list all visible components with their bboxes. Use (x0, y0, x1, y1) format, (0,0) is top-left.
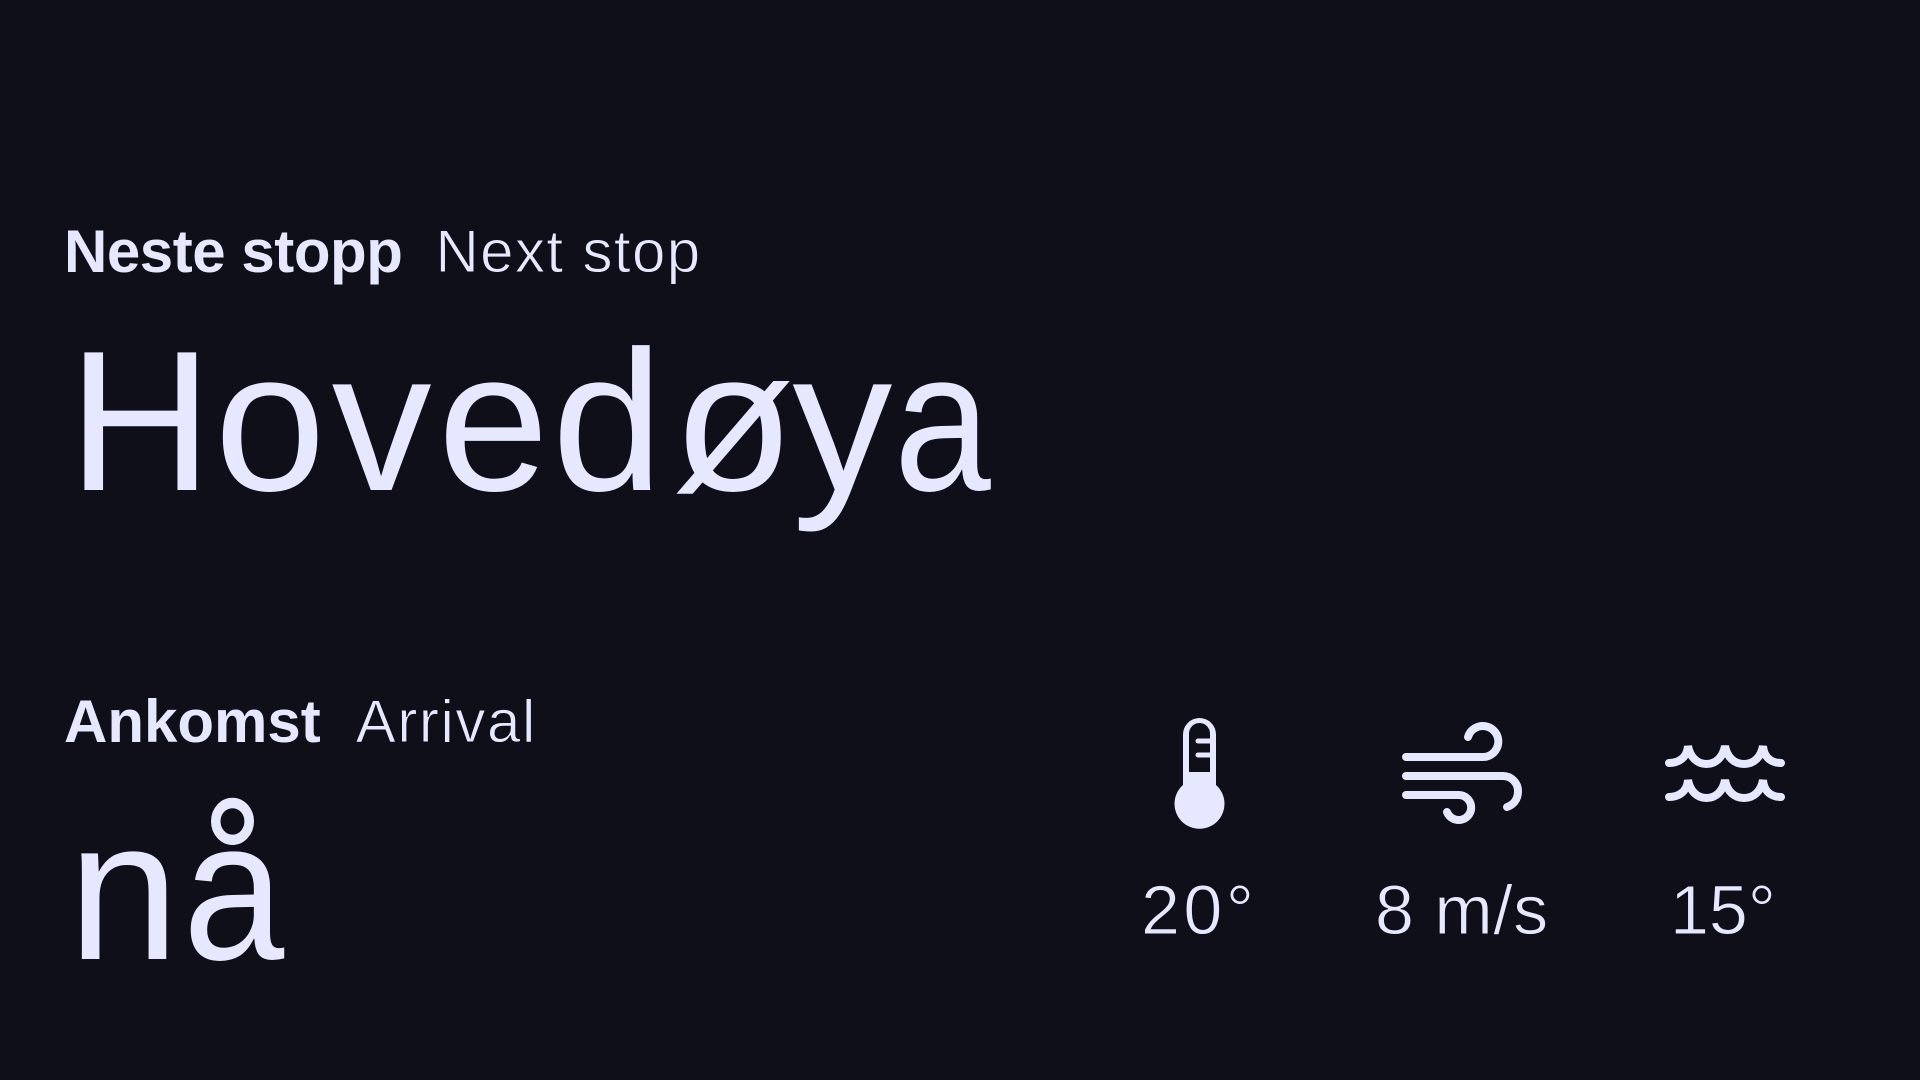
heading: arrival time: n (68, 779, 183, 1002)
heading: destination name: a (894, 310, 991, 533)
label: next stop: Neste stopp Next stop (64, 218, 702, 285)
heading: destination name: Hovedøy (68, 310, 894, 533)
value: water temperature: 15° (1670, 871, 1776, 949)
value: air temperature: 20° (1141, 871, 1257, 949)
label: arrival: Ankomst Arrival (64, 688, 537, 755)
heading: arrival time: å (183, 779, 284, 1002)
value: wind speed: 8 m/s (1375, 871, 1549, 949)
heading: arrival time (68, 779, 284, 1002)
